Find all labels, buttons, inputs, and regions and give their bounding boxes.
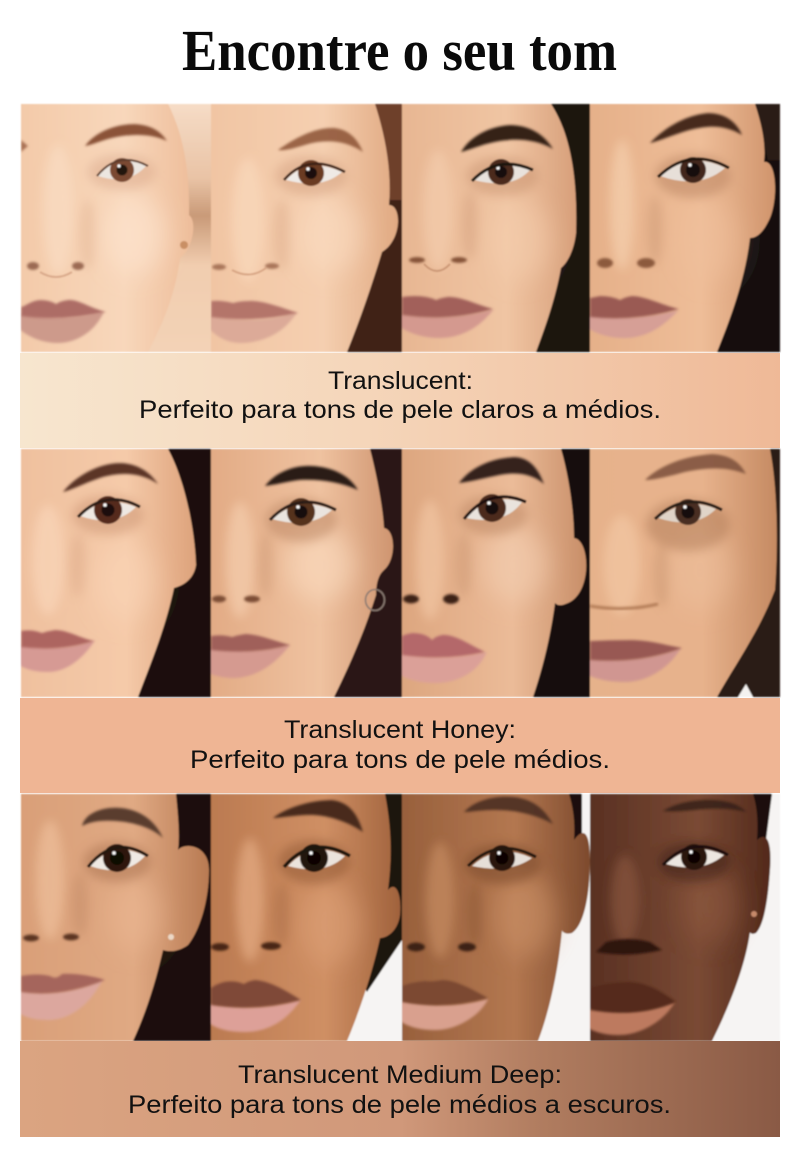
title: Encontre o seu tom [182, 18, 617, 83]
shade name: Translucent Medium Deep: [238, 1061, 562, 1089]
portrait: light skin, blonde hair [20, 103, 212, 353]
panel: Translucent Medium Deep portraits [21, 794, 780, 1041]
portrait: medium skin, straight dark hair [20, 448, 212, 698]
shade name: Translucent: [328, 367, 473, 395]
portrait: medium skin, hoop earring [210, 448, 403, 698]
portrait: medium skin, dark hair, visible ear [400, 448, 591, 698]
portrait: brown skin, afro-textured hair [210, 793, 404, 1041]
portrait: medium skin, curly dark hair [588, 102, 782, 353]
portrait: tan skin, braided hair, stud earring [20, 793, 212, 1041]
portrait: fair skin, brown hair [210, 102, 403, 353]
shade description: Perfeito para tons de pele médios. [190, 746, 610, 774]
panel: Translucent portraits [21, 104, 780, 352]
portrait: medium-tan skin, curly hair [588, 448, 782, 698]
earring [366, 590, 384, 610]
panel: Translucent description band [20, 353, 780, 448]
panel: Translucent Honey portraits [21, 449, 780, 697]
shade description: Perfeito para tons de pele claros a médios. [139, 396, 661, 424]
panel: Translucent Honey description band [20, 698, 780, 793]
portrait: deep brown skin, white background [400, 793, 592, 1041]
shade name: Translucent Honey: [284, 716, 516, 744]
panel: Translucent Medium Deep description band [20, 1041, 780, 1137]
portrait: light-medium skin, dark hair [400, 102, 591, 353]
shade description: Perfeito para tons de pele médios a escuros. [128, 1091, 671, 1119]
portrait: dark skin, white background [589, 793, 780, 1041]
white background patch [738, 684, 753, 697]
